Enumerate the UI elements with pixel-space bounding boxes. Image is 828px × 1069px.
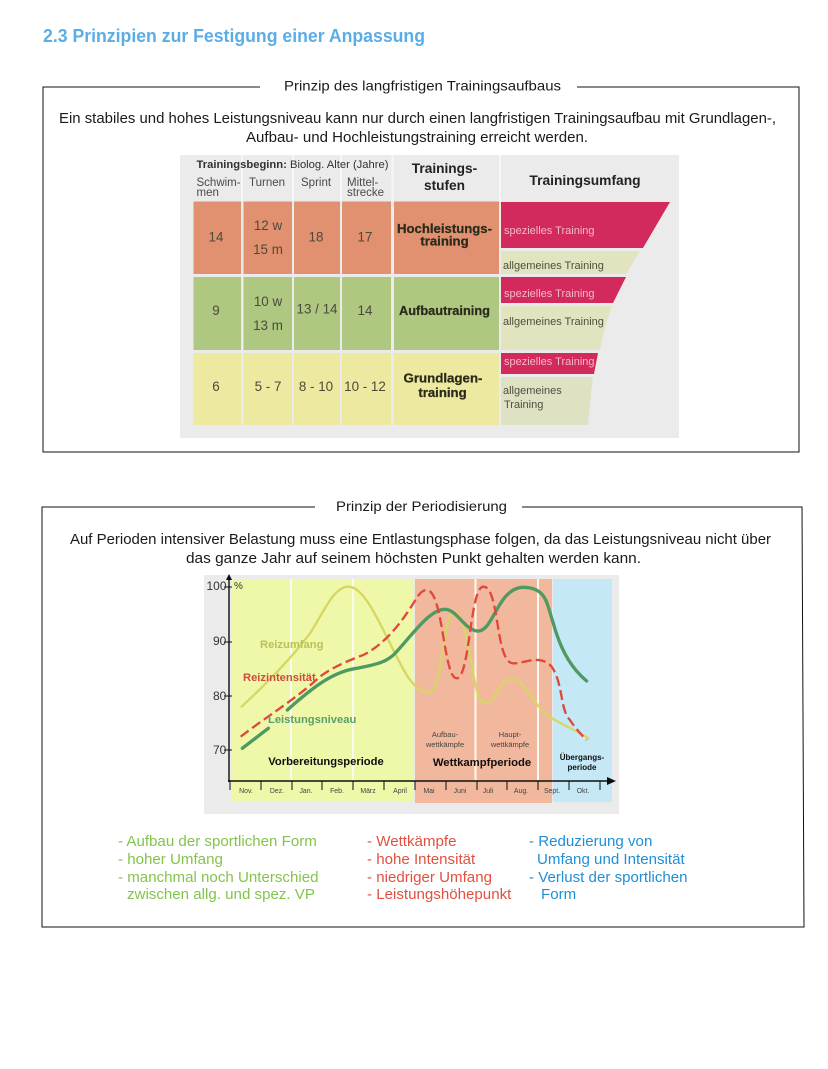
row: Aufbautraining: 10 w — [254, 294, 282, 309]
table header: Mittel- — [347, 177, 378, 189]
row: Grundlagentraining: 10 - 12 — [344, 379, 386, 394]
row: Grundlagentraining: 6 — [212, 379, 220, 394]
title: 2.3 Prinzipien zur Festigung einer Anpassung — [43, 26, 425, 46]
intro text: das ganze Jahr auf seinem höchsten Punkt gehalten werden kann. — [186, 551, 641, 567]
list: Uebergangsperiode: Umfang und Intensität — [537, 851, 685, 868]
axis labels: Aug. — [514, 788, 528, 795]
axis labels: Sept. — [544, 788, 560, 795]
row: Grundlagentraining: training — [418, 385, 467, 400]
row: Hochleistungstraining: 12 w — [254, 218, 282, 233]
list: Uebergangsperiode: - Verlust der sportlichen — [529, 869, 688, 886]
axis labels: 80 — [213, 689, 227, 703]
intro text — [70, 532, 771, 567]
panel heading: Prinzip der Periodisierung — [336, 498, 507, 514]
funnel: Trainingsumfang: spezielles Training — [504, 356, 594, 368]
row: Grundlagentraining — [194, 353, 499, 425]
funnel: Trainingsumfang: allgemeines — [503, 385, 562, 397]
table header: stufen — [424, 178, 465, 193]
list: Wettkampfperiode: - niedriger Umfang — [367, 869, 492, 886]
table header: Turnen — [249, 177, 285, 189]
curve labels: Reizintensität — [243, 672, 316, 684]
list: Vorbereitungsperiode — [118, 833, 319, 903]
axis labels — [206, 579, 589, 795]
curve labels: Reizumfang — [260, 639, 324, 651]
table: training stages — [180, 155, 679, 438]
row: Hochleistungstraining: 18 — [309, 230, 323, 244]
period labels: wettkämpfe — [425, 740, 464, 749]
chart: periodization — [204, 574, 619, 814]
axis labels: Okt. — [577, 788, 589, 795]
row: Aufbautraining: 13 m — [253, 318, 283, 333]
list: Wettkampfperiode: - hohe Intensität — [367, 851, 476, 868]
table header: Trainingsumfang — [529, 173, 641, 188]
funnel: Trainingsumfang — [501, 202, 670, 425]
table header: Schwim- — [196, 177, 241, 189]
curves — [241, 587, 588, 748]
table header: Sprint — [301, 177, 332, 189]
period bands — [232, 579, 612, 803]
list: Wettkampfperiode — [367, 833, 512, 903]
row: Hochleistungstraining: Hochleistungs- — [397, 221, 492, 236]
axis labels: Mai — [423, 788, 435, 795]
curve labels — [243, 639, 356, 726]
axis labels: 90 — [213, 634, 227, 648]
list: Uebergangsperiode — [529, 833, 688, 903]
funnel: Trainingsumfang: spezielles Training — [504, 225, 594, 237]
axis labels: Nov. — [239, 788, 253, 795]
table header: men — [196, 187, 219, 199]
axis labels: Feb. — [330, 788, 344, 795]
list: Wettkampfperiode: - Wettkämpfe — [367, 833, 456, 850]
table header: Trainings- — [412, 161, 478, 176]
period labels: Vorbereitungsperiode — [268, 756, 384, 768]
funnel: Trainingsumfang: spezielles Training — [504, 288, 594, 300]
intro text — [59, 111, 776, 146]
curve labels: Leistungsniveau — [268, 714, 356, 726]
table header — [196, 159, 641, 199]
table header: Trainingsbeginn: Biolog. Alter (Jahre) — [196, 159, 388, 171]
row: Aufbautraining: 14 — [358, 303, 373, 318]
row: Grundlagentraining: 8 - 10 — [299, 379, 333, 394]
curve: Reizintensitaet — [241, 587, 587, 740]
intro text: Ein stabiles und hohes Leistungsniveau kann nur durch einen langfristigen Trainingsaufbau mit Grundlagen-, — [59, 111, 776, 127]
axis labels: Jan. — [299, 788, 313, 795]
list: Vorbereitungsperiode: zwischen allg. und spez. VP — [127, 886, 315, 903]
row: Hochleistungstraining: 17 — [358, 230, 372, 244]
axis labels: % — [234, 581, 243, 592]
axis labels: Dez. — [270, 788, 284, 795]
row: Hochleistungstraining — [194, 202, 499, 274]
panel heading: Prinzip des langfristigen Trainingsaufbaus — [284, 78, 561, 94]
list: Vorbereitungsperiode: - manchmal noch Unterschied — [118, 869, 319, 886]
table background — [180, 155, 679, 438]
chart background — [204, 575, 619, 814]
period labels: Wettkampfperiode — [433, 757, 531, 769]
period labels — [268, 730, 605, 772]
row: Aufbautraining: Aufbautraining — [399, 303, 490, 318]
row: Hochleistungstraining: 14 — [209, 230, 224, 244]
axis labels: April — [393, 788, 407, 795]
panel frame — [42, 507, 804, 927]
curve: Leistungsniveau — [242, 587, 587, 748]
list: Vorbereitungsperiode: - hoher Umfang — [118, 851, 223, 868]
axis labels: 70 — [213, 743, 227, 757]
row: Hochleistungstraining: training — [420, 234, 469, 248]
intro text: Auf Perioden intensiver Belastung muss eine Entlastungsphase folgen, da das Leistungsniveau nicht über — [70, 532, 771, 548]
list: Vorbereitungsperiode: - Aufbau der sportlichen Form — [118, 833, 317, 850]
list: Uebergangsperiode: - Reduzierung von — [529, 833, 652, 850]
period labels: Aufbau- — [432, 730, 459, 739]
row: Grundlagentraining: Grundlagen- — [404, 370, 482, 386]
axis labels: Juni — [454, 788, 467, 795]
list: Uebergangsperiode: Form — [541, 886, 576, 903]
row: Aufbautraining — [194, 277, 499, 350]
row: Grundlagentraining: 5 - 7 — [255, 379, 281, 394]
funnel: Trainingsumfang: allgemeines Training — [503, 260, 604, 272]
axis labels: März — [360, 788, 376, 795]
period labels: periode — [568, 763, 597, 772]
row: Aufbautraining: 9 — [212, 303, 220, 318]
panel: langfristiger Trainingsaufbau — [43, 78, 799, 452]
period labels: Übergangs- — [560, 753, 605, 762]
panel frame — [43, 87, 799, 452]
panel: Periodisierung — [42, 498, 804, 927]
period labels: wettkämpfe — [490, 740, 529, 749]
axis labels: Juli — [483, 788, 494, 795]
table header: strecke — [347, 187, 384, 199]
funnel: Trainingsumfang: allgemeines Training — [503, 316, 604, 328]
list: Wettkampfperiode: - Leistungshöhepunkt — [367, 886, 512, 903]
axis labels: 100 — [206, 579, 227, 593]
intro text: Aufbau- und Hochleistungstraining erreicht werden. — [246, 130, 588, 146]
row: Hochleistungstraining: 15 m — [253, 242, 283, 257]
period labels: Haupt- — [499, 730, 522, 739]
funnel: Trainingsumfang: Training — [504, 399, 543, 411]
curve: Reizumfang — [242, 587, 588, 738]
axes — [224, 574, 616, 790]
row: Aufbautraining: 13 / 14 — [297, 302, 338, 316]
